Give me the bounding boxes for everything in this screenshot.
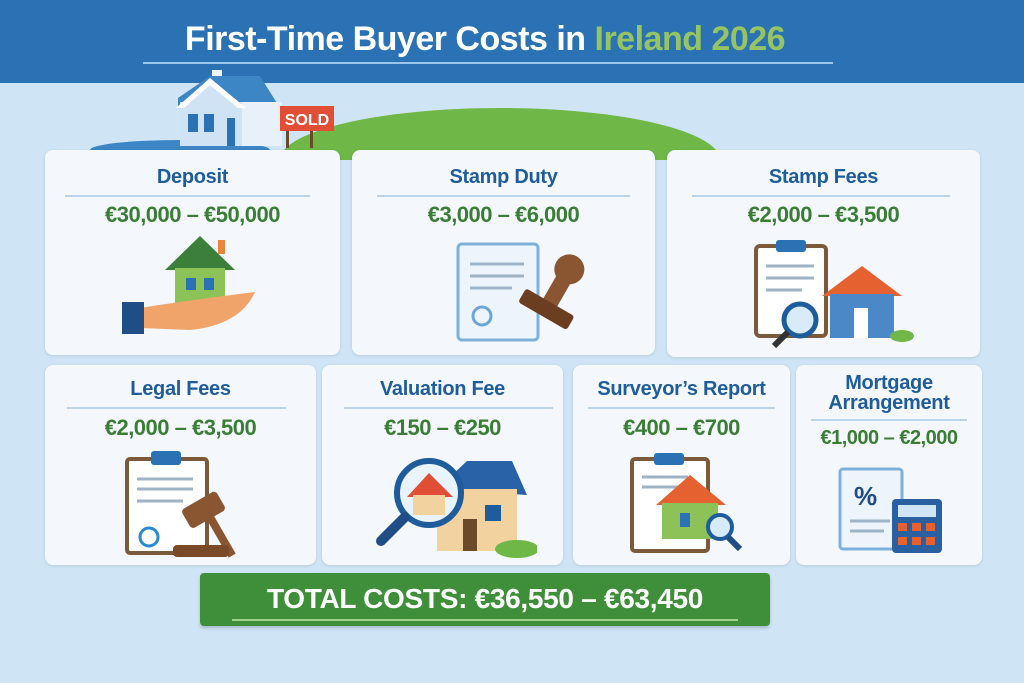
panel: stamp fees: [667, 150, 980, 357]
panel: legal fees: Legal Fees: [130, 378, 231, 400]
title: First-Time Buyer Costs in Ireland 2026: [185, 20, 785, 58]
panel: valuation fee: [322, 365, 563, 565]
panel: stamp duty: [352, 150, 655, 355]
panel: mortgage arrangement: Mortgage: [845, 372, 933, 394]
total costs bar: [200, 573, 770, 626]
panel: surveyor's report: Surveyor’s Report: [597, 378, 766, 400]
hill: [90, 108, 716, 160]
panel: deposit: Deposit: [157, 166, 228, 188]
panel: surveyor's report: €400 – €700: [623, 415, 740, 440]
panel: deposit: [45, 150, 340, 355]
icon: document and stamp: [456, 242, 584, 342]
icon: house with sold sign: SOLD: [285, 112, 329, 129]
panel: valuation fee: Valuation Fee: [380, 378, 505, 400]
icon: clipboard house magnifier: [754, 240, 914, 348]
panel: mortgage arrangement: Arrangement: [828, 392, 950, 414]
panel: stamp duty: Stamp Duty: [449, 166, 558, 188]
icon: document and calculator: [838, 468, 942, 553]
panel: mortgage arrangement: €1,000 – €2,000: [820, 427, 958, 449]
icon: hand holding house: [122, 236, 255, 334]
panel: stamp fees: €2,000 – €3,500: [748, 202, 899, 227]
panel: deposit: €30,000 – €50,000: [105, 202, 280, 227]
panel: surveyor's report: [573, 365, 790, 565]
icon: house with sold sign: [176, 70, 334, 148]
panel: stamp fees: Stamp Fees: [769, 166, 878, 188]
panel: valuation fee: €150 – €250: [384, 415, 501, 440]
header band: [0, 0, 1024, 83]
panel: legal fees: [45, 365, 316, 565]
icon: document and calculator: %: [854, 481, 877, 511]
panel: stamp duty: €3,000 – €6,000: [428, 202, 579, 227]
panel: mortgage arrangement: [796, 365, 982, 565]
total costs bar: TOTAL COSTS: €36,550 – €63,450: [267, 583, 703, 614]
icon: clipboard with house: [630, 453, 742, 553]
icon: magnifier over house: [376, 458, 537, 558]
panel: legal fees: €2,000 – €3,500: [105, 415, 256, 440]
icon: clipboard and gavel: [125, 451, 236, 558]
